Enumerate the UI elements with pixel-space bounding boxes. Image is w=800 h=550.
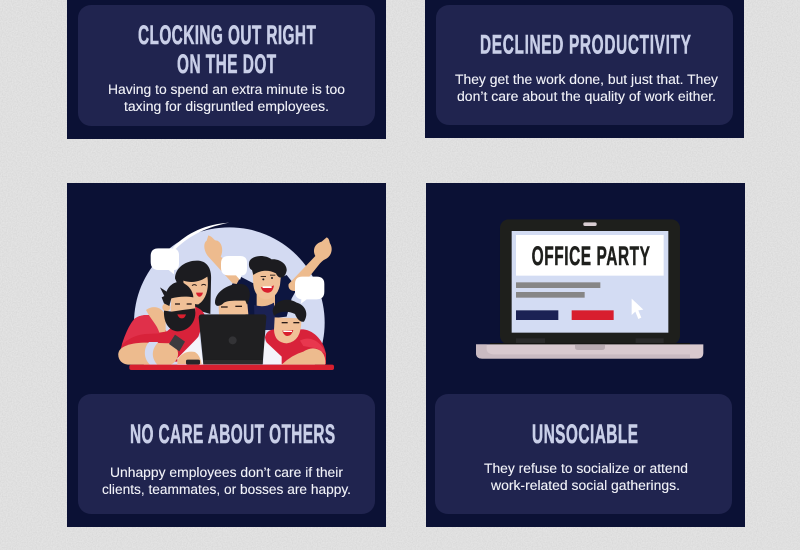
hinges xyxy=(516,338,664,344)
description: clocking out xyxy=(108,82,345,114)
panel: unsociable xyxy=(426,183,745,527)
base xyxy=(476,343,703,359)
description: no care about others: Unhappy employees don’t care if their xyxy=(110,465,344,480)
panel: no care about others xyxy=(67,183,386,527)
heading: unsociable: UNSOCIABLE xyxy=(532,418,638,449)
panel: declined productivity xyxy=(425,0,744,138)
laptop xyxy=(199,314,266,364)
speech bubbles xyxy=(151,248,324,304)
illustration: laptop showing office party invitation xyxy=(476,219,703,359)
laptop lid xyxy=(500,219,680,344)
screen xyxy=(512,231,668,333)
right man xyxy=(265,300,326,365)
text placeholder lines xyxy=(516,282,600,298)
description: declined productivity: They get the work done, but just that. They xyxy=(455,72,718,87)
heading: no care about others: NO CARE ABOUT OTHERS xyxy=(130,418,335,449)
heading: clocking out right on the dot: ON THE DOT xyxy=(177,48,277,79)
text card: no care about others xyxy=(78,394,375,514)
text card: unsociable xyxy=(435,394,732,514)
webcam xyxy=(583,222,597,226)
description: no care about others: clients, teammates, or bosses are happy. xyxy=(102,482,351,497)
description: unsociable: work-related social gatherings. xyxy=(490,478,680,493)
heading: declined productivity: DECLINED PRODUCTIVITY xyxy=(480,29,691,60)
heading: clocking out right on the dot xyxy=(138,19,316,79)
center boy xyxy=(215,284,250,314)
description: unsociable xyxy=(484,461,688,493)
description: unsociable: They refuse to socialize or attend xyxy=(484,461,688,476)
swoosh xyxy=(173,223,229,249)
table xyxy=(129,365,334,370)
banner xyxy=(516,235,664,276)
banner: OFFICE PARTY xyxy=(532,241,650,271)
description: no care about others xyxy=(102,465,351,497)
left bearded man xyxy=(118,282,205,365)
backdrop circle xyxy=(134,227,325,365)
cursor xyxy=(632,299,643,319)
text card: clocking out xyxy=(78,5,375,126)
illustration: group of coworkers around a laptop xyxy=(118,222,334,370)
panel: clocking out right on the dot xyxy=(67,0,386,139)
white sleeves and hand xyxy=(177,336,282,365)
text card: declined productivity xyxy=(436,5,733,125)
back man with raised arms xyxy=(204,235,332,330)
woman xyxy=(175,261,211,314)
description: clocking out: Having to spend an extra minute is too xyxy=(108,82,345,97)
heading: clocking out right on the dot: CLOCKING OUT RIGHT xyxy=(138,19,316,50)
description: declined productivity: don’t care about the quality of work either. xyxy=(457,89,716,104)
description: declined productivity xyxy=(455,72,718,104)
description: clocking out: taxing for disgruntled employees. xyxy=(124,99,329,114)
buttons xyxy=(516,310,614,320)
